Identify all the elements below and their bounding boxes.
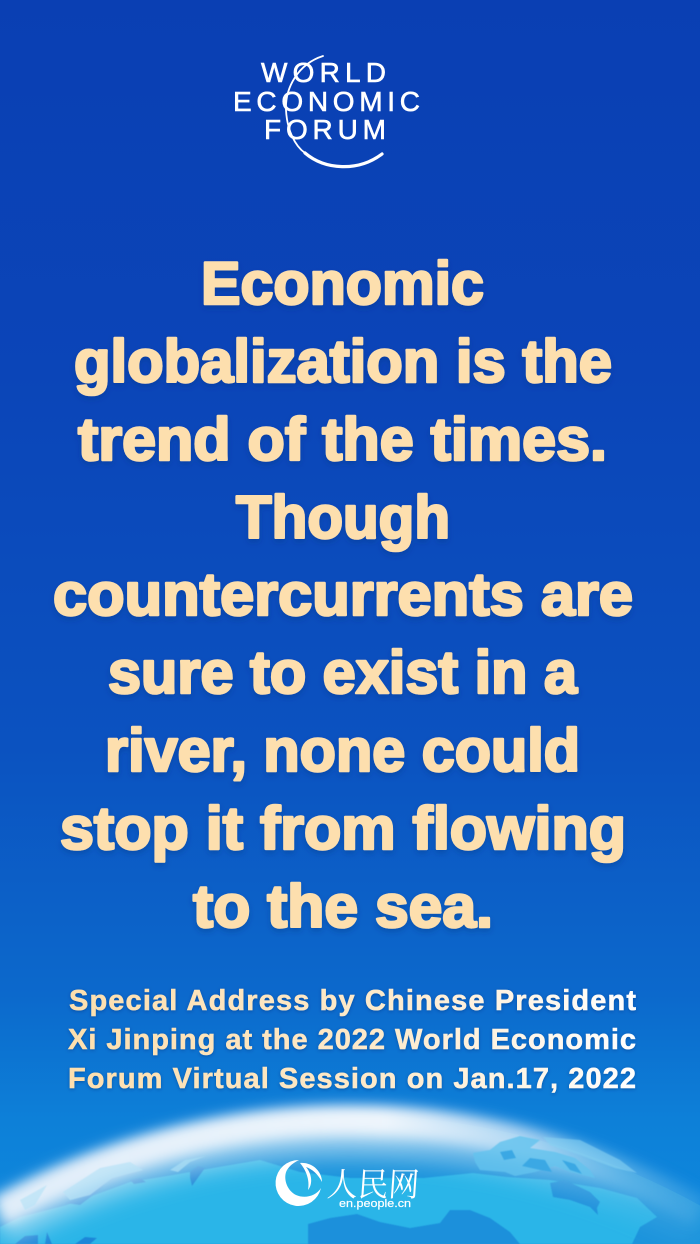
site address: en.people.cn [339,1198,411,1210]
source attribution: Xi Jinping at the 2022 World Economic [68,1024,636,1056]
headline quote: globalization is the [74,328,612,395]
logo wordmark [233,57,420,145]
Hudson Bay [550,1180,600,1215]
brand name in Chinese: 人民网 [326,1159,421,1206]
atmosphere halo [0,1121,700,1225]
icon: swirl globe [276,1160,322,1206]
headline quote: Though [236,484,450,551]
source attribution: Forum Virtual Session on Jan.17, 2022 [68,1063,636,1095]
pale islands [20,1136,637,1210]
logo arc [286,56,323,153]
logo wordmark: WORLD [261,57,386,88]
headline quote [53,250,633,940]
north-west seas [15,1232,97,1244]
logo: people.cn [276,1159,421,1210]
logo wordmark: FORUM [264,114,386,145]
source attribution: Special Address by Chinese President [69,985,636,1017]
headline quote: trend of the times. [78,406,607,473]
globe [0,1115,700,1244]
map land shapes [0,1160,657,1244]
main land mass [0,1160,657,1244]
headline quote: stop it from flowing [60,795,626,862]
logo: World Economic Forum [233,56,420,167]
source attribution [68,985,636,1095]
headline quote: countercurrents are [53,561,633,628]
logo wordmark: ECONOMIC [233,86,420,117]
ocean disc [0,1115,700,1244]
headline quote: Economic [201,250,484,317]
lower sea [308,1210,520,1244]
headline quote: to the sea. [193,873,493,940]
headline quote: sure to exist in a [108,639,578,706]
headline quote: river, none could [105,717,580,784]
